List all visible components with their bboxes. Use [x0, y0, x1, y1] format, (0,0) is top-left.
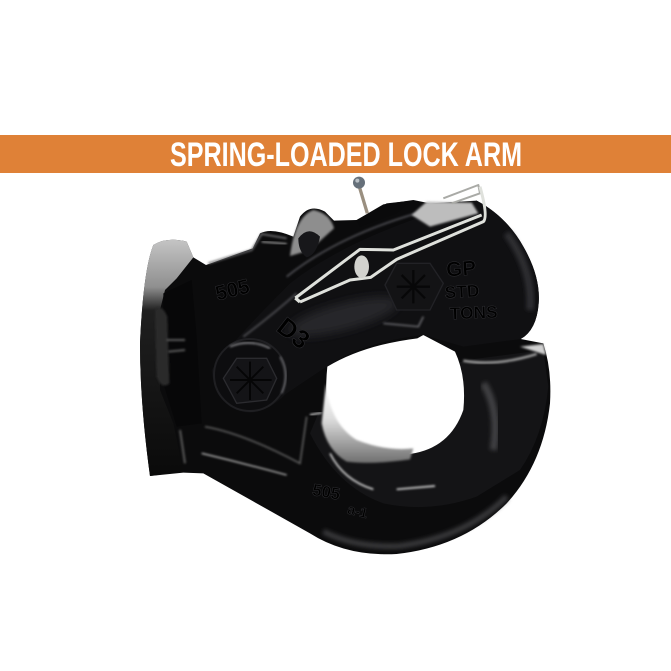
embossed casting marks: TONS	[449, 302, 498, 323]
hook rim shading	[310, 344, 548, 546]
embossed casting marks: GP	[445, 257, 477, 282]
spring lock clip	[295, 185, 485, 302]
pintle hook photo illustration	[140, 177, 550, 554]
latch pin with ball	[353, 177, 367, 213]
embossed casting marks: 505	[311, 480, 342, 504]
inner hook surface	[322, 383, 413, 463]
hook body silhouette	[140, 200, 550, 554]
clip rivet	[354, 255, 369, 278]
embossed casting marks: a-1	[346, 501, 370, 521]
lower arm highlights	[202, 413, 322, 475]
embossed casting marks	[213, 257, 498, 521]
lock bolt head	[385, 263, 443, 310]
title text: SPRING-LOADED LOCK ARM	[170, 136, 522, 174]
title banner	[0, 135, 671, 174]
lock handle knob	[290, 201, 412, 257]
mounting plate	[140, 240, 202, 476]
pivot bolt	[214, 339, 286, 411]
lock arm	[212, 201, 539, 413]
body top highlights	[208, 234, 287, 263]
embossed casting marks: STD	[444, 281, 480, 302]
embossed casting marks: 505	[213, 275, 252, 306]
embossed casting marks: D3	[271, 311, 316, 355]
hook opening	[326, 335, 464, 454]
